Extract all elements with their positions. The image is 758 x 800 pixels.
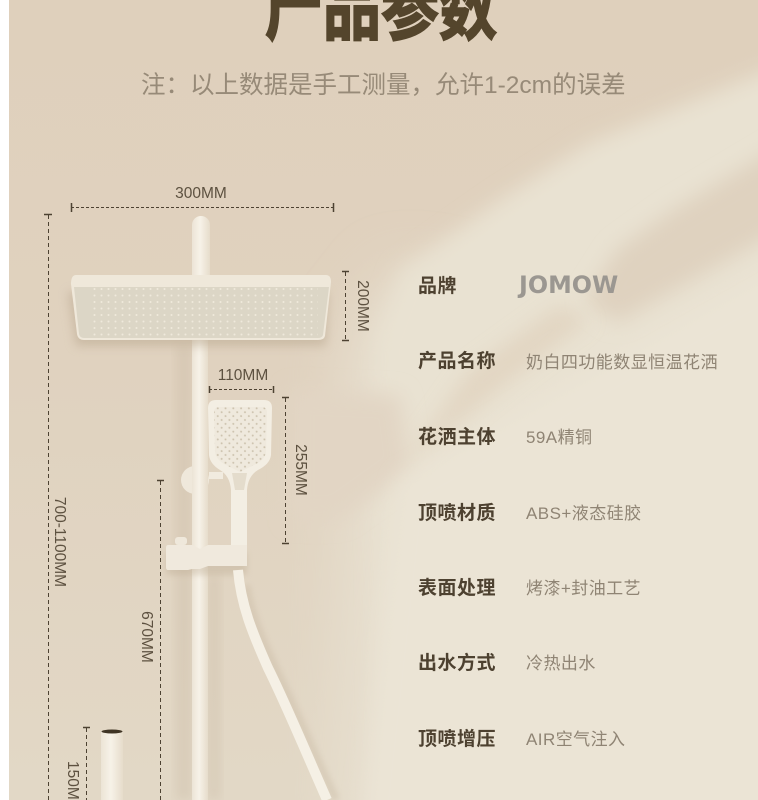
dimension lines (44, 203, 349, 800)
dimension text: 300MM (175, 185, 227, 202)
spec row: body value: 59A精铜 (526, 428, 592, 447)
inlet pipe (101, 730, 123, 800)
dimension text: 110MM (218, 367, 268, 384)
dimension text: 700-1100MM (51, 497, 68, 587)
sliding bracket (166, 537, 247, 575)
spec row: top spray material label: 顶喷材质 (418, 503, 496, 524)
spec row: product name label: 产品名称 (418, 351, 496, 372)
dimension text (51, 185, 371, 800)
spec row: product name value: 奶白四功能数显恒温花洒 (526, 353, 718, 372)
shower column (176, 216, 220, 800)
note: 注：以上数据是手工测量，允许1-2cm的误差 (141, 72, 626, 99)
dimension text: 200MM (354, 280, 371, 332)
spec row: water outlet label: 出水方式 (418, 653, 496, 674)
spec row: pressure label: 顶喷增压 (418, 729, 496, 750)
spec row: body label: 花洒主体 (418, 427, 496, 448)
brand value: JOMOW (519, 271, 618, 299)
spec row: pressure value: AIR空气注入 (526, 730, 626, 749)
overhead shower head (68, 275, 331, 346)
hose (238, 570, 336, 800)
spec row: brand: 品牌 (418, 276, 457, 297)
wall connector (181, 450, 223, 505)
spec row: surface label: 表面处理 (418, 578, 496, 599)
dimension text: 255MM (292, 444, 309, 496)
spec row: top spray material value: ABS+液态硅胶 (526, 504, 642, 523)
spec row: surface value: 烤漆+封油工艺 (526, 579, 641, 598)
hand shower (208, 400, 272, 545)
dimension text: 670MM (138, 611, 155, 663)
spec row: water outlet value: 冷热出水 (526, 654, 596, 673)
